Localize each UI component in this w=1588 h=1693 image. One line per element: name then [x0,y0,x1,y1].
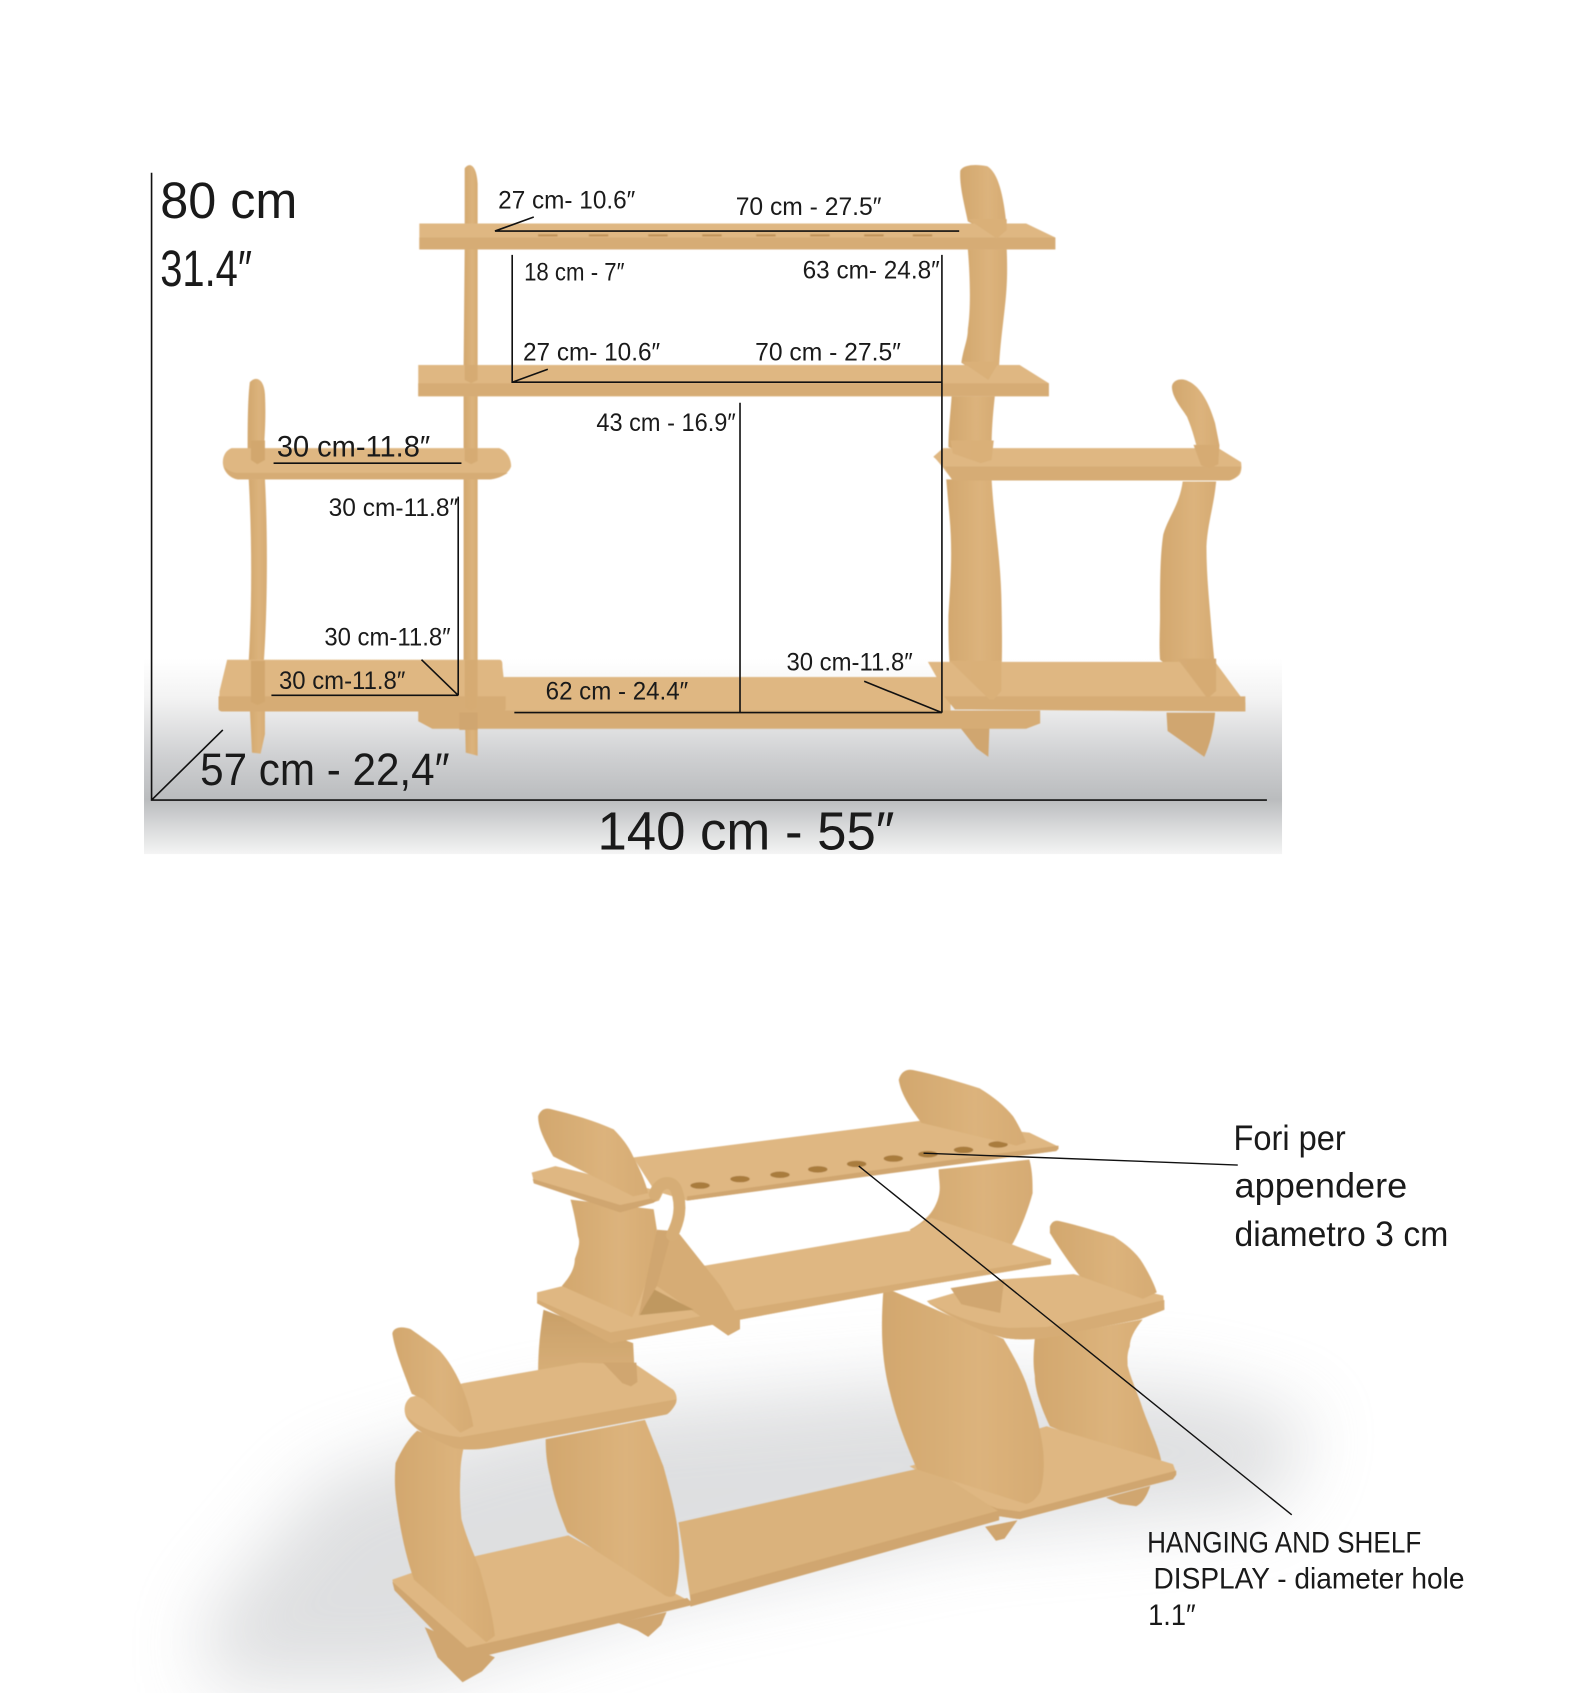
panel: perspective view [206,1070,1465,1684]
front foot [425,1627,495,1682]
rear wave [1034,1319,1161,1471]
callout: English note: HANGING AND SHELF [1147,1528,1421,1560]
bottom middle plank [504,677,951,713]
second shelf [537,1218,1051,1343]
callout: Italian note: appendere [1235,1165,1407,1205]
floor shadow [144,659,1282,854]
dimension labels [277,187,940,706]
peg holes [690,1141,1008,1189]
post through third shelf [951,1279,1005,1313]
dimension labels: 30 cm-11.8″ [329,495,458,522]
lower left-back blade [546,1420,679,1597]
bracket side [639,1230,672,1316]
peg holes [538,234,932,236]
lower central blade [946,479,1002,700]
perspective shelf unit [392,1070,1176,1682]
width label: 140 cm - 55″ [597,802,894,862]
callout: English note [1147,1528,1465,1632]
right top fin [960,165,1007,238]
callout: English note: 1.1″ [1148,1600,1196,1632]
center foot [960,728,989,757]
inner left upright [464,165,478,756]
middle-left blade [538,1310,635,1384]
second shelf [418,365,1049,396]
third shelf left [405,1363,677,1450]
far left blade [395,1431,495,1642]
right base shelf [910,1426,1176,1519]
bottom right shelf [928,662,1245,712]
dimension labels: 63 cm- 24.8″ [803,258,940,285]
bracket ring [655,1183,680,1235]
top shelf plank [633,1121,1059,1201]
dimension labels: 18 cm - 7″ [524,260,625,287]
panel: front view with dimensions [144,165,1282,862]
leader lines [859,1153,1292,1515]
callout: Italian note: Fori per [1233,1118,1346,1158]
bracket shadow [640,1289,694,1315]
dimension labels: 30 cm-11.8″ [277,432,430,464]
left fin [392,1327,473,1433]
blade tab on third shelf [603,1363,637,1386]
cast shadow [206,1382,1312,1684]
bracket body [657,1233,740,1336]
height label: 80 cm [160,172,297,229]
dimension labels: 43 cm - 16.9″ [596,410,736,437]
top shelf left end [532,1166,663,1213]
dimension labels: 27 cm- 10.6″ [498,187,635,214]
left outer upright [248,379,267,754]
center feet [618,1520,1018,1637]
right upper shelf [933,448,1241,480]
dimension lines [152,173,1267,800]
depth label: 57 cm - 22,4″ [200,744,450,795]
height label [160,172,297,297]
long bottom plank [678,1466,999,1599]
right upper wave [961,249,1007,380]
dimension labels: 70 cm - 27.5″ [736,194,882,221]
top shelf [419,224,1055,249]
rear foot [1106,1486,1150,1506]
left base shelf [392,1535,691,1657]
upper right wave [910,1160,1033,1256]
dimension labels: 30 cm-11.8″ [786,650,913,677]
upright tabs through shelves [459,713,478,730]
dimension labels: 30 cm-11.8″ [279,668,405,695]
height label: 31.4″ [160,240,252,297]
dimension labels: 70 cm - 27.5″ [755,340,901,367]
right foot [1167,713,1215,757]
left upper shelf [223,448,511,479]
dimension labels: 30 cm-11.8″ [324,625,451,652]
big right blade [882,1287,1044,1504]
callout: Italian note [1233,1118,1448,1254]
right middle wave [948,396,995,462]
top right fin [899,1070,1026,1146]
bottom left shelf [219,660,506,708]
hanging bracket [639,1183,740,1336]
right fin [1050,1221,1157,1299]
third shelf right [927,1274,1164,1339]
dimension labels: 62 cm - 24.4″ [546,679,688,706]
upper left wave [562,1200,657,1317]
top left fin [538,1109,648,1196]
dimension labels: 27 cm- 10.6″ [523,340,660,367]
right end fin [1172,379,1219,465]
callout: English note: DISPLAY - diameter hole [1154,1563,1465,1595]
front view shelf unit [219,165,1245,757]
callout: Italian note: diametro 3 cm [1235,1214,1448,1254]
right end wave [1160,482,1216,698]
